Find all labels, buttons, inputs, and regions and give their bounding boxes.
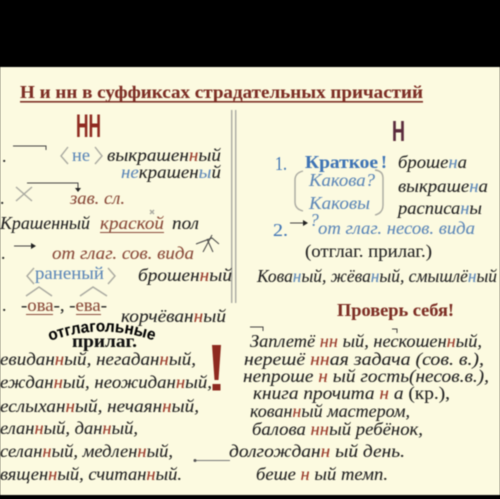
icon: exclamation mark bbox=[212, 345, 221, 390]
divider between columns bbox=[231, 110, 236, 303]
word list: exceptions: еланный, данный, bbox=[0, 418, 138, 438]
rule 1: краткое: Какова? bbox=[308, 170, 375, 190]
rule 1: краткое: 1. bbox=[275, 153, 287, 175]
rule 1: краткое bbox=[275, 152, 488, 218]
exercise text: кованный мастером, bbox=[250, 401, 410, 421]
word list: exceptions: ежданный, неожидан ный, bbox=[0, 372, 212, 392]
examples: кованый, жёваный, смышлёный: Кованый, жёваный, смышлёный bbox=[256, 266, 497, 286]
rule 3: брошен ный bbox=[138, 265, 232, 285]
word list: exceptions: евиданный, негадан ный, bbox=[0, 349, 196, 369]
label: отглагольные прилаг. bbox=[48, 322, 156, 352]
exercise text: беше н ый темп. bbox=[256, 464, 388, 484]
heading: проверь себя: Проверь себя! bbox=[337, 300, 454, 320]
rule 2: от глаголов несовершенного вида: от глаг. несов. вида bbox=[318, 218, 475, 238]
panel: rules for НН bbox=[0, 144, 232, 484]
word list: exceptions: еслыхан ный, нечаян ный, bbox=[0, 396, 199, 416]
word list: exceptions: вященный, считан ный. bbox=[0, 464, 182, 484]
label: отглагольные прилаг.: прилаг. bbox=[72, 331, 137, 351]
rule 3 bbox=[1, 235, 232, 285]
rule 3: . bbox=[1, 243, 5, 263]
rule 4: . bbox=[2, 295, 6, 315]
rule 1: . bbox=[2, 146, 6, 166]
example: крашенный краской пол: пол bbox=[172, 213, 199, 233]
exercise text: непроше н ый гость(несов.в.), bbox=[243, 366, 489, 386]
exercise text: нерешё нная задача (сов. в.), bbox=[244, 349, 484, 369]
rule 1: не bbox=[72, 145, 90, 165]
example: крашенный краской пол: краской bbox=[100, 213, 164, 233]
rule 1: краткое: ! bbox=[381, 152, 387, 172]
rule 1: краткое: выкраше на bbox=[398, 176, 488, 196]
rule 2: от глаголов несовершенного вида: ? bbox=[310, 210, 319, 230]
label: отглагольные прилаг.: отглагольные bbox=[48, 322, 156, 341]
arrow: to exception list bbox=[194, 459, 230, 462]
heading: Н: Н bbox=[392, 116, 405, 148]
exercise text: Заплетё нн ый, нескошен ный, bbox=[250, 331, 482, 351]
exercise text: книга прочита н а (кр.), bbox=[253, 383, 450, 403]
rule 2: от глаголов несовершенного вида bbox=[273, 210, 475, 261]
rule 1: некрашен ый bbox=[121, 162, 221, 182]
word list: exceptions: селанный, медлен ный, bbox=[0, 441, 173, 461]
rule 2 bbox=[0, 183, 125, 208]
rule 4: -ова-, -ева- bbox=[21, 295, 107, 315]
rule 3: раненый bbox=[35, 263, 104, 283]
exercise text: долгождан н ый день. bbox=[229, 441, 405, 461]
rule 1: краткое: брошена bbox=[398, 152, 467, 172]
rule 2: от глаголов несовершенного вида: (отглаг. прилаг.) bbox=[305, 241, 432, 261]
rule 2: . bbox=[0, 188, 4, 208]
rule 2: от глаголов несовершенного вида: 2. bbox=[273, 220, 288, 240]
rule 4 bbox=[2, 287, 226, 326]
rule 1 bbox=[2, 145, 221, 182]
rule 1: краткое: расписаны bbox=[396, 198, 482, 218]
exercise text bbox=[229, 327, 489, 484]
title: Н и нн в суффиксах страдательных причастий bbox=[20, 82, 423, 102]
example: крашенный краской пол: Крашенный bbox=[0, 213, 90, 233]
rule 2: зав. сл. bbox=[69, 188, 125, 208]
word list: exceptions bbox=[0, 349, 212, 484]
rule 1: краткое: Краткое bbox=[305, 152, 378, 172]
rule 1: краткое: Каковы bbox=[308, 193, 370, 213]
example: крашенный краской пол bbox=[0, 210, 199, 233]
rule 3: от глаг. сов. вида bbox=[52, 243, 194, 263]
heading: НН: НН bbox=[76, 108, 101, 144]
rule 1: выкрашен ный bbox=[107, 145, 221, 165]
exercise text: балова нный ребёнок, bbox=[252, 419, 423, 439]
rule 4: корчёван ный bbox=[121, 306, 226, 326]
panel: rules for Н bbox=[194, 152, 497, 484]
